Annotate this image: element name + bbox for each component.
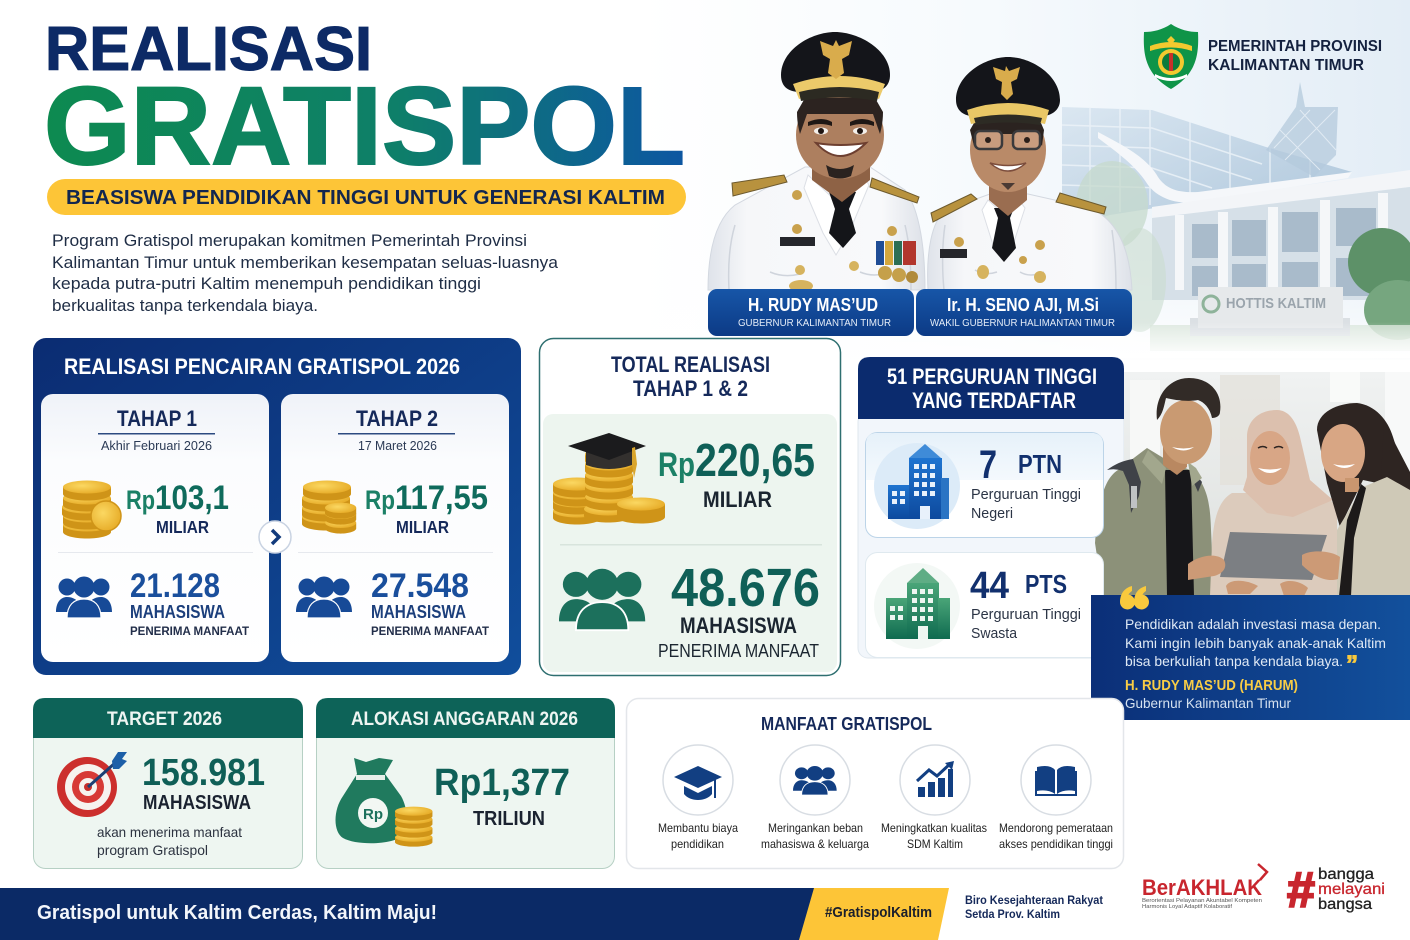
hashtag tab: #GratispolKaltim xyxy=(825,904,932,921)
text: government name: KALIMANTAN TIMUR xyxy=(1208,57,1364,74)
nameplate: Ir. H. Seno Aji: WAKIL GUBERNUR HALIMANTAN TIMUR xyxy=(930,317,1115,329)
panel: target 2026: program Gratispol xyxy=(97,842,208,858)
heading: realisasi pencairan: REALISASI PENCAIRAN GRATISPOL 2026 xyxy=(64,354,460,379)
benefit: meringankan beban: mahasiswa & keluarga xyxy=(761,837,869,851)
card: PTS xyxy=(866,552,1104,658)
nameplate: H. Rudy Mas'ud xyxy=(708,289,914,336)
logo: bangga melayani bangsa: melayani xyxy=(1318,881,1385,898)
panel: 51 perguruan tinggi: YANG TERDAFTAR xyxy=(912,388,1076,413)
card: PTN: 7 xyxy=(979,443,997,487)
panel: target 2026 xyxy=(33,698,303,868)
card: tahap 2: MAHASISWA xyxy=(371,602,466,622)
card: tahap 2: TAHAP 2 xyxy=(356,406,438,431)
photo: Gubernur Rudy Mas'ud xyxy=(708,32,925,292)
text: building sign: HOTTIS KALTIM xyxy=(1226,295,1326,312)
intro paragraph: Program Gratispol merupakan komitmen Pemerintah Provinsi xyxy=(52,232,527,250)
card: tahap 1: 103,1 xyxy=(155,479,229,517)
icon: students xyxy=(296,576,352,618)
panel: total realisasi: MILIAR xyxy=(703,487,772,512)
title: GRATISPOL: GRATISPOL xyxy=(44,65,685,188)
card: tahap 1: MAHASISWA xyxy=(130,602,225,622)
nameplate: Ir. H. Seno Aji: Ir. H. SENO AJI, M.Si xyxy=(947,295,1099,315)
text: government name xyxy=(1208,38,1382,74)
card: PTS: Perguruan Tinggi xyxy=(971,607,1081,623)
panel: target 2026: 158.981 xyxy=(142,752,265,794)
card: PTN xyxy=(866,432,1104,538)
panel: alokasi anggaran xyxy=(316,698,615,868)
card: tahap 1: PENERIMA MANFAAT xyxy=(130,624,250,638)
card: tahap 1: 21.128 xyxy=(130,567,220,605)
intro paragraph: Kalimantan Timur untuk memberikan kesempatan seluas-luasnya xyxy=(52,254,559,272)
panel: target 2026: TARGET 2026 xyxy=(107,709,222,730)
arrow: tahap 1 to tahap 2 xyxy=(259,521,291,553)
card: PTS: PTS xyxy=(1025,569,1067,599)
icon: blue campus building xyxy=(874,443,960,529)
card: tahap 2: Rp xyxy=(365,485,395,515)
logo: bangga melayani bangsa: bangsa xyxy=(1318,896,1372,913)
nameplate: H. Rudy Mas'ud: H. RUDY MAS’UD xyxy=(748,295,878,315)
icon: coins with graduation cap xyxy=(553,433,665,524)
card: tahap 1: MILIAR xyxy=(156,517,209,537)
benefit: meringankan beban xyxy=(761,745,869,851)
benefit: pemerataan akses: Mendorong pemerataan xyxy=(999,821,1113,835)
hashtag tab xyxy=(799,888,949,940)
panel: alokasi anggaran: TRILIUN xyxy=(473,808,545,830)
subtitle pill xyxy=(47,179,686,215)
callout: governor quote: H. RUDY MAS’UD (HARUM) xyxy=(1125,678,1298,694)
icon: opening quote mark xyxy=(1120,586,1149,610)
logo: bangga melayani bangsa: bangga xyxy=(1318,866,1374,883)
icon: money bag with coins xyxy=(336,758,432,847)
benefit: pemerataan akses xyxy=(999,745,1113,851)
benefit: kualitas SDM: SDM Kaltim xyxy=(907,837,963,851)
footer credit xyxy=(965,893,1103,921)
card: PTN: PTN xyxy=(1018,449,1062,479)
panel: realisasi pencairan xyxy=(33,338,521,675)
icon: money bag with coins: Rp xyxy=(363,806,383,823)
card: tahap 2: PENERIMA MANFAAT xyxy=(371,624,490,638)
panel: manfaat gratispol xyxy=(626,698,1124,868)
panel: 51 perguruan tinggi: 51 PERGURUAN TINGGI xyxy=(887,364,1097,389)
callout: governor quote: bisa berkuliah tanpa kendala biaya. xyxy=(1125,653,1343,669)
card: tahap 2: 17 Maret 2026 xyxy=(358,439,437,453)
icon: coins xyxy=(62,480,121,538)
footer banner xyxy=(0,888,949,940)
nameplate: H. Rudy Mas'ud: GUBERNUR KALIMANTAN TIMUR xyxy=(738,317,891,329)
panel: alokasi anggaran: Rp1,377 xyxy=(434,762,570,804)
icon: students xyxy=(56,576,112,618)
callout: governor quote xyxy=(1091,586,1410,720)
panel: total realisasi: PENERIMA MANFAAT xyxy=(658,641,819,661)
footer credit: Biro Kesejahteraan Rakyat xyxy=(965,893,1103,907)
intro paragraph: berkualitas tanpa terkendala biaya. xyxy=(52,297,318,315)
callout: governor quote: ” xyxy=(1346,651,1358,678)
benefit: biaya pendidikan: Membantu biaya xyxy=(658,821,738,835)
card: PTS: Swasta xyxy=(971,626,1018,642)
benefit: biaya pendidikan xyxy=(658,745,738,851)
intro paragraph xyxy=(52,232,559,315)
icon: green campus building xyxy=(874,563,960,649)
card: tahap 1 xyxy=(41,394,269,662)
benefit: kualitas SDM xyxy=(881,745,987,851)
panel: total realisasi: TAHAP 1 & 2 xyxy=(633,376,748,401)
intro paragraph: kepada putra-putri Kaltim menempuh pendidikan tinggi xyxy=(52,275,481,293)
text: government name: PEMERINTAH PROVINSI xyxy=(1208,38,1382,55)
panel: total realisasi: TOTAL REALISASI xyxy=(611,352,770,377)
card: tahap 2: 117,55 xyxy=(395,479,488,517)
footer banner: Gratispol untuk Kaltim Cerdas, Kaltim Maju! xyxy=(37,902,437,924)
benefit: pemerataan akses: akses pendidikan tinggi xyxy=(999,837,1113,851)
panel: 51 perguruan tinggi xyxy=(858,357,1124,658)
benefit: kualitas SDM: Meningkatkan kualitas xyxy=(881,821,987,835)
card: PTS: 44 xyxy=(970,565,1009,607)
callout: governor quote: Gubernur Kalimantan Timur xyxy=(1125,695,1291,711)
icon: Kaltim provincial shield xyxy=(1144,24,1198,89)
logo: BerAKHLAK: BerAKHLAK xyxy=(1142,875,1262,900)
panel: total realisasi xyxy=(540,338,840,676)
callout: governor quote: Pendidikan adalah investasi masa depan. xyxy=(1125,616,1381,632)
icon: target with arrow xyxy=(57,752,127,817)
footer credit: Setda Prov. Kaltim xyxy=(965,907,1060,921)
icon: students xyxy=(559,569,645,630)
nameplate: Ir. H. Seno Aji xyxy=(916,289,1132,336)
title: REALISASI: REALISASI xyxy=(45,15,372,84)
panel: total realisasi: 220,65 xyxy=(695,434,815,486)
panel: total realisasi: 48.676 xyxy=(671,558,820,618)
panel: manfaat gratispol: MANFAAT GRATISPOL xyxy=(761,714,932,734)
logo: bangga melayani bangsa: # xyxy=(1287,862,1315,918)
photo: three students with tablet xyxy=(1095,372,1410,598)
card: tahap 1: TAHAP 1 xyxy=(117,406,197,431)
building: Kaltim campus backdrop xyxy=(1060,82,1410,358)
panel: target 2026: akan menerima manfaat xyxy=(97,824,242,840)
logo: BerAKHLAK: Berorientasi Pelayanan Akuntabel Kompeten xyxy=(1142,898,1262,904)
panel: total realisasi: MAHASISWA xyxy=(680,613,797,638)
panel: alokasi anggaran: ALOKASI ANGGARAN 2026 xyxy=(351,709,578,730)
card: tahap 2 xyxy=(281,394,509,662)
logo: bangga melayani bangsa xyxy=(1287,862,1385,918)
card: PTN: Perguruan Tinggi xyxy=(971,487,1081,503)
card: PTN: Negeri xyxy=(971,506,1013,522)
benefit: meringankan beban: Meringankan beban xyxy=(768,821,863,835)
panel: total realisasi: Rp xyxy=(658,446,695,484)
card: tahap 1: Rp xyxy=(126,485,155,515)
card: tahap 2: MILIAR xyxy=(396,517,449,537)
benefit: biaya pendidikan: pendidikan xyxy=(671,837,724,851)
card: tahap 1: Akhir Februari 2026 xyxy=(101,439,212,453)
card: tahap 2: 27.548 xyxy=(371,567,469,605)
subtitle pill: BEASISWA PENDIDIKAN TINGGI UNTUK GENERASI KALTIM xyxy=(66,187,665,209)
icon: coins xyxy=(302,480,356,534)
callout: governor quote: Kami ingin lebih banyak anak-anak Kaltim xyxy=(1125,635,1386,651)
logo: BerAKHLAK xyxy=(1142,864,1267,910)
photo: Wakil Gubernur Seno Aji xyxy=(928,57,1132,290)
logo: BerAKHLAK: Harmonis Loyal Adaptif Kolaboratif xyxy=(1142,904,1233,910)
panel: target 2026: MAHASISWA xyxy=(143,792,251,814)
